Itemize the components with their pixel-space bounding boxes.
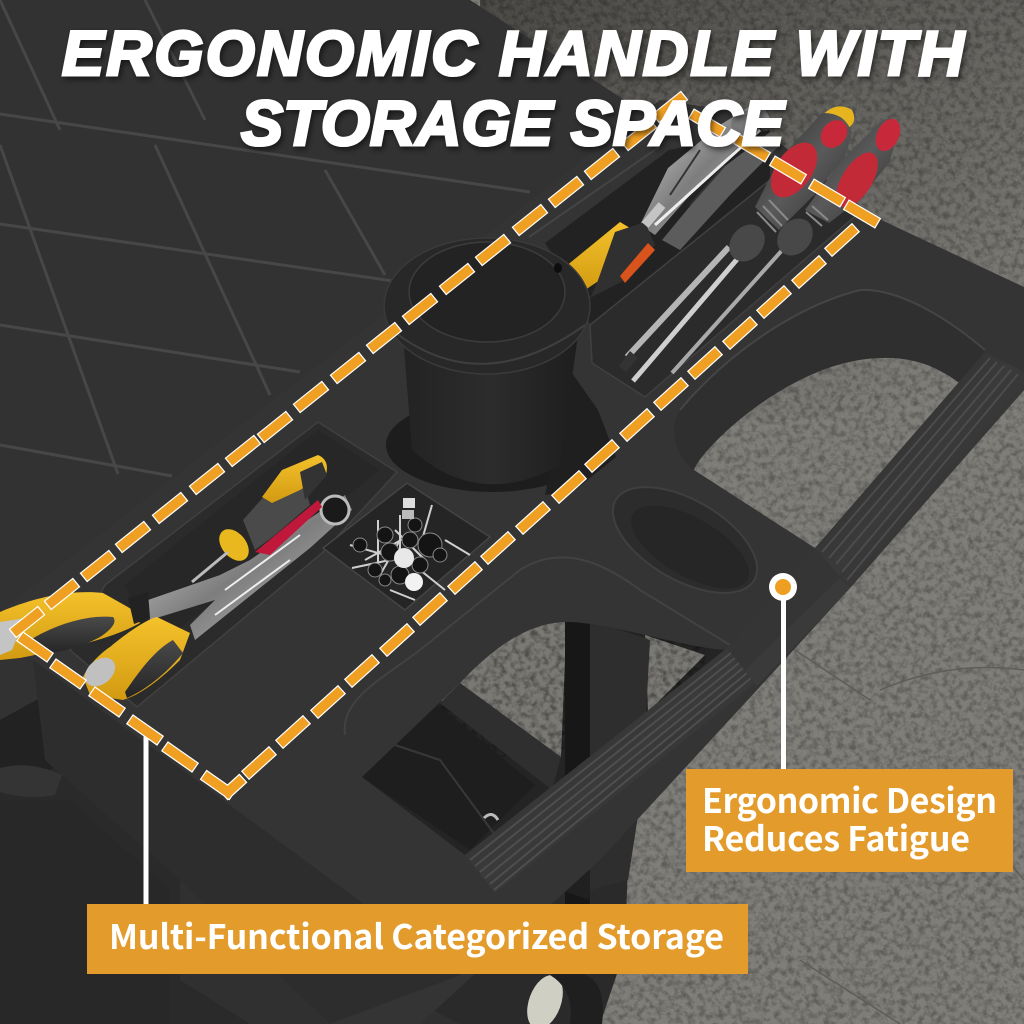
tool: yellow-handled driver	[565, 205, 662, 298]
left storage compartment	[70, 422, 397, 707]
dashed highlight outline	[17, 99, 873, 792]
callout: categorized storage: Multi-Functional Categorized Storage	[109, 910, 724, 959]
grip: upper ribbed handle	[815, 352, 1024, 588]
grip: lower ribbed handle	[465, 648, 757, 893]
leader line and marker: ergonomic	[769, 573, 797, 770]
callout: ergonomic design: Reduces Fatigue	[702, 812, 970, 861]
callout: ergonomic design: Ergonomic Design	[702, 774, 997, 823]
leader line: storage	[144, 735, 148, 905]
lip shading, hole 1	[674, 290, 985, 470]
small parts compartment	[323, 483, 490, 610]
lip highlight, hole 2	[345, 557, 730, 735]
lip highlight, hole 1	[680, 290, 985, 410]
tool: pliers	[0, 592, 190, 700]
tool: red and black screwdrivers	[722, 106, 905, 269]
tool: wrenches	[640, 100, 780, 250]
tool: yellow screwdriver and ratchet	[148, 455, 352, 640]
center handle block	[727, 548, 850, 686]
title	[62, 19, 966, 159]
title: STORAGE SPACE	[241, 89, 786, 159]
coffee cup	[384, 238, 590, 484]
handle openings: floor, posts and frame seen through	[340, 610, 740, 912]
callout: categorized storage	[87, 904, 748, 974]
callout: ergonomic design	[686, 769, 1013, 872]
tray: wrenches	[529, 130, 770, 325]
title: ERGONOMIC HANDLE WITH	[62, 19, 966, 89]
tool: screwdriver shafts	[619, 247, 785, 381]
front edge shade	[33, 660, 460, 1024]
cart lower structure below the handle	[0, 640, 628, 1024]
oval recess	[596, 465, 774, 615]
upper cart shelf with grid pattern	[0, 0, 700, 720]
tray: screwdrivers	[590, 180, 860, 397]
coffee cup holder	[386, 373, 616, 495]
